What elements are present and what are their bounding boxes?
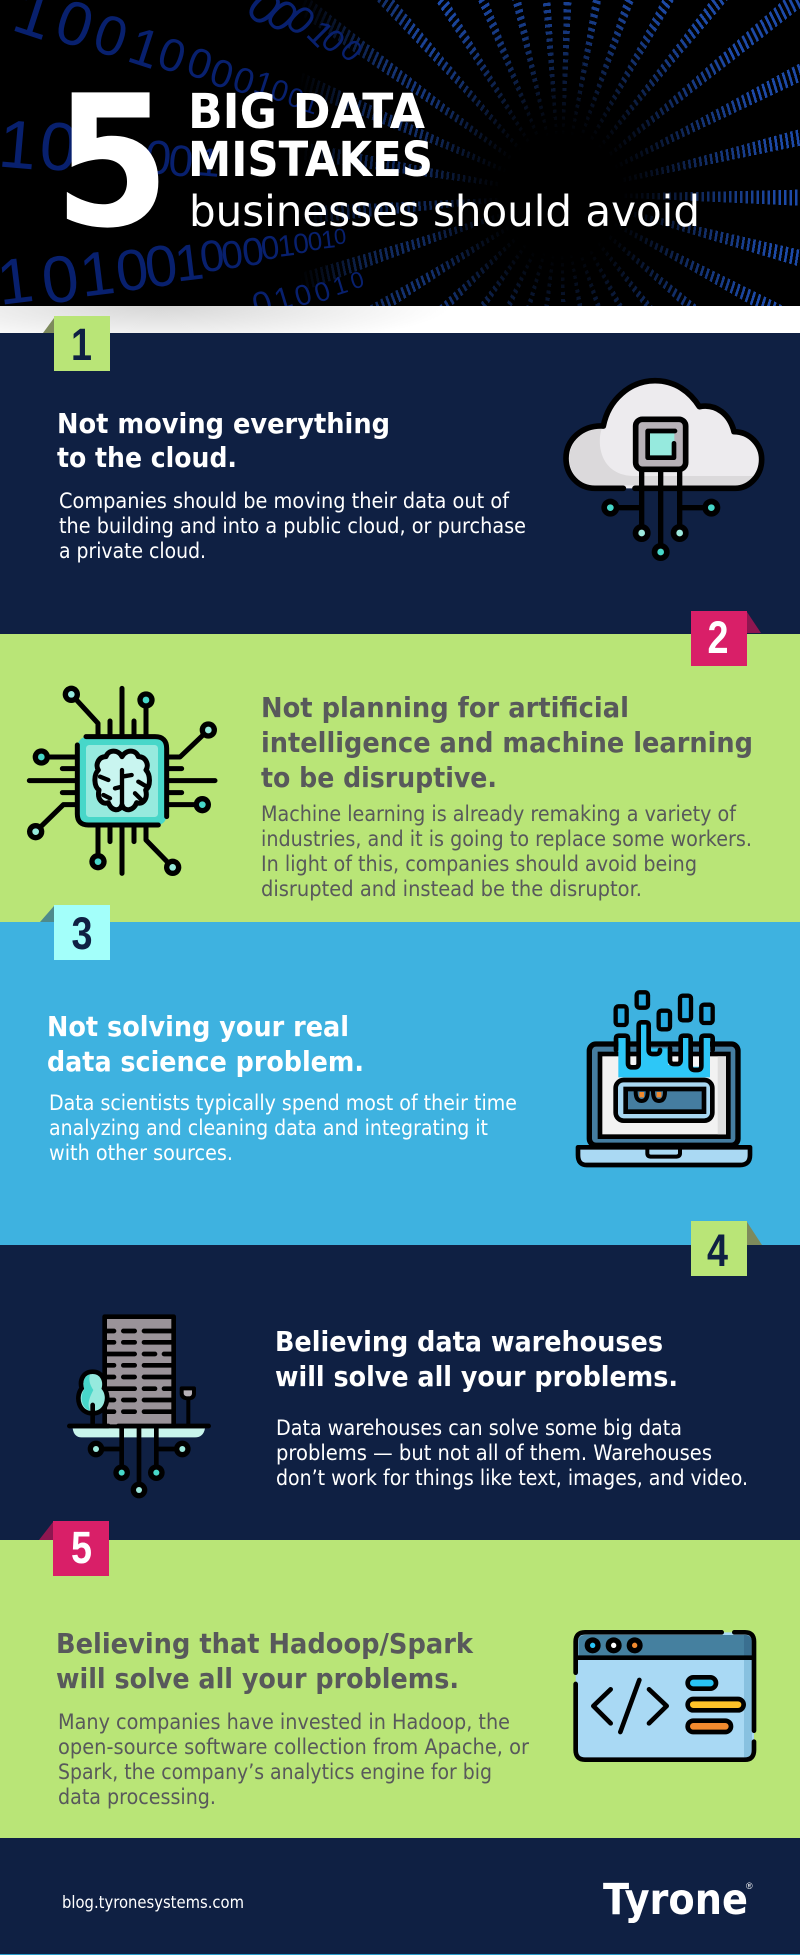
body text 3: analyzing and cleaning data and integrating it	[49, 1116, 488, 1141]
body text 3: Data scientists typically spend most of their time	[49, 1091, 517, 1116]
body text 2: disrupted and instead be the disruptor.	[261, 877, 642, 902]
large binary digits: 0	[314, 22, 352, 60]
logo: Tyrone: ®	[746, 1881, 753, 1891]
heading 4	[275, 1326, 678, 1393]
heading 1: Not moving everything	[57, 408, 390, 440]
large binary digits: 1	[320, 225, 337, 255]
heading 3: data science problem.	[47, 1046, 364, 1078]
large binary digits: 1	[172, 232, 207, 293]
body text 4: Data warehouses can solve some big data	[276, 1416, 682, 1441]
large binary digits: 1	[276, 229, 296, 264]
large binary digits: 1	[249, 63, 278, 104]
body text 1: Companies should be moving their data out of	[59, 489, 509, 514]
large binary digits: 0	[332, 223, 348, 250]
badge 3	[40, 905, 110, 960]
large binary digits: 0	[181, 38, 218, 89]
body text 5: open-source software collection from Apache, or	[58, 1735, 529, 1760]
panel: mistake 3	[0, 905, 800, 1245]
body text 4: problems — but not all of them. Warehouses	[276, 1441, 712, 1466]
subtitle: businesses should avoid	[189, 187, 700, 237]
left fade over rays	[0, 0, 800, 306]
badge 1	[43, 316, 110, 371]
large binary digits: 0	[197, 231, 227, 282]
body text 2: In light of this, companies should avoid being	[261, 852, 697, 877]
large binary digits: 0	[333, 33, 369, 69]
body text 4: don’t work for things like text, images, and video.	[276, 1466, 748, 1491]
icon: code window	[576, 1632, 754, 1760]
badge 4: 4	[707, 1225, 728, 1276]
large binary digits: 0	[228, 58, 260, 103]
large binary digits: 1	[330, 271, 351, 301]
heading 5	[56, 1628, 474, 1695]
title line: MISTAKES: MISTAKES	[188, 132, 433, 188]
panel: mistake 2	[0, 611, 800, 922]
title line: BIG DATA: BIG DATA	[188, 84, 425, 140]
body text 5: Many companies have invested in Hadoop, the	[58, 1710, 510, 1735]
title	[54, 56, 700, 268]
heading 2	[261, 692, 753, 794]
heading 1: to the cloud.	[57, 442, 237, 474]
badge 5	[39, 1521, 109, 1576]
body text 2: industries, and it is going to replace some workers.	[261, 827, 752, 852]
icon: cloud with chip	[566, 381, 762, 561]
large binary digits: 0	[167, 136, 195, 187]
heading 3	[47, 1011, 364, 1078]
large binary digits: 0	[86, 1, 135, 70]
icon: brain chip	[27, 686, 217, 876]
badge 5: 5	[71, 1522, 92, 1573]
panel: mistake 1	[0, 316, 800, 634]
large binary digits: 0	[141, 232, 181, 301]
body text 2	[261, 802, 752, 902]
shadow strip under header	[0, 306, 800, 333]
heading 4: will solve all your problems.	[275, 1361, 678, 1393]
heading 3: Not solving your real	[47, 1011, 349, 1043]
large binary digits: 0	[240, 230, 267, 275]
dark tunnel centre	[0, 0, 800, 306]
icon: laptop with data	[578, 992, 750, 1165]
body text 2: Machine learning is already remaking a variety of	[261, 802, 736, 827]
heading 2: intelligence and machine learning	[261, 727, 753, 759]
large binary digits: 0	[142, 131, 173, 186]
large binary digits: 0	[219, 233, 246, 278]
body text 4	[276, 1416, 748, 1491]
large binary digits: 0	[267, 73, 293, 110]
heading 4: Believing data warehouses	[275, 1326, 663, 1358]
footer	[0, 1838, 800, 1955]
body text 1: the building and into a public cloud, or purchase	[59, 514, 526, 539]
large binary digits: 0	[37, 107, 81, 186]
body text 3	[49, 1091, 517, 1166]
badge 2	[691, 611, 761, 666]
heading 1	[57, 408, 390, 474]
large binary digits: 0	[205, 51, 239, 98]
large binary digits	[0, 0, 369, 306]
large binary digits: 1	[300, 89, 322, 120]
body text 5: Spark, the company’s analytics engine for big	[58, 1760, 492, 1785]
heading 2: to be disruptive.	[261, 762, 497, 794]
body text 1	[59, 489, 526, 564]
big numeral 5: 5	[54, 56, 170, 268]
panel: mistake 5	[0, 1521, 800, 1838]
body text 1: a private cloud.	[59, 539, 206, 564]
large binary digits: 0	[152, 26, 192, 84]
panel: mistake 4	[0, 1221, 800, 1540]
large binary digits: 1	[196, 140, 222, 186]
heading 5: will solve all your problems.	[56, 1663, 459, 1695]
badge 4	[691, 1221, 762, 1276]
large binary digits: 0	[347, 266, 367, 294]
large binary digits: 1	[299, 12, 342, 55]
large binary digits: 0	[284, 81, 307, 115]
badge 2: 2	[708, 612, 728, 663]
logo: Tyrone: Tyrone	[603, 1875, 748, 1925]
large binary digits: 1	[121, 16, 168, 81]
badge 1: 1	[71, 319, 92, 370]
footer url: blog.tyronesystems.com	[62, 1893, 244, 1912]
badge 3: 3	[72, 908, 92, 959]
body text 3: with other sources.	[49, 1141, 233, 1166]
heading 2: Not planning for artificial	[261, 692, 629, 724]
body text 5	[58, 1710, 529, 1810]
body text 5: data processing.	[58, 1785, 216, 1810]
large binary digits: 0	[259, 228, 281, 267]
binary tunnel rays	[0, 0, 800, 975]
header banner	[0, 0, 800, 306]
icon: data warehouse building	[69, 1317, 209, 1498]
heading 5: Believing that Hadoop/Spark	[56, 1628, 474, 1660]
large binary digits: 0	[306, 225, 324, 257]
large binary digits: 0	[112, 236, 152, 305]
large binary digits: 0	[291, 227, 311, 260]
